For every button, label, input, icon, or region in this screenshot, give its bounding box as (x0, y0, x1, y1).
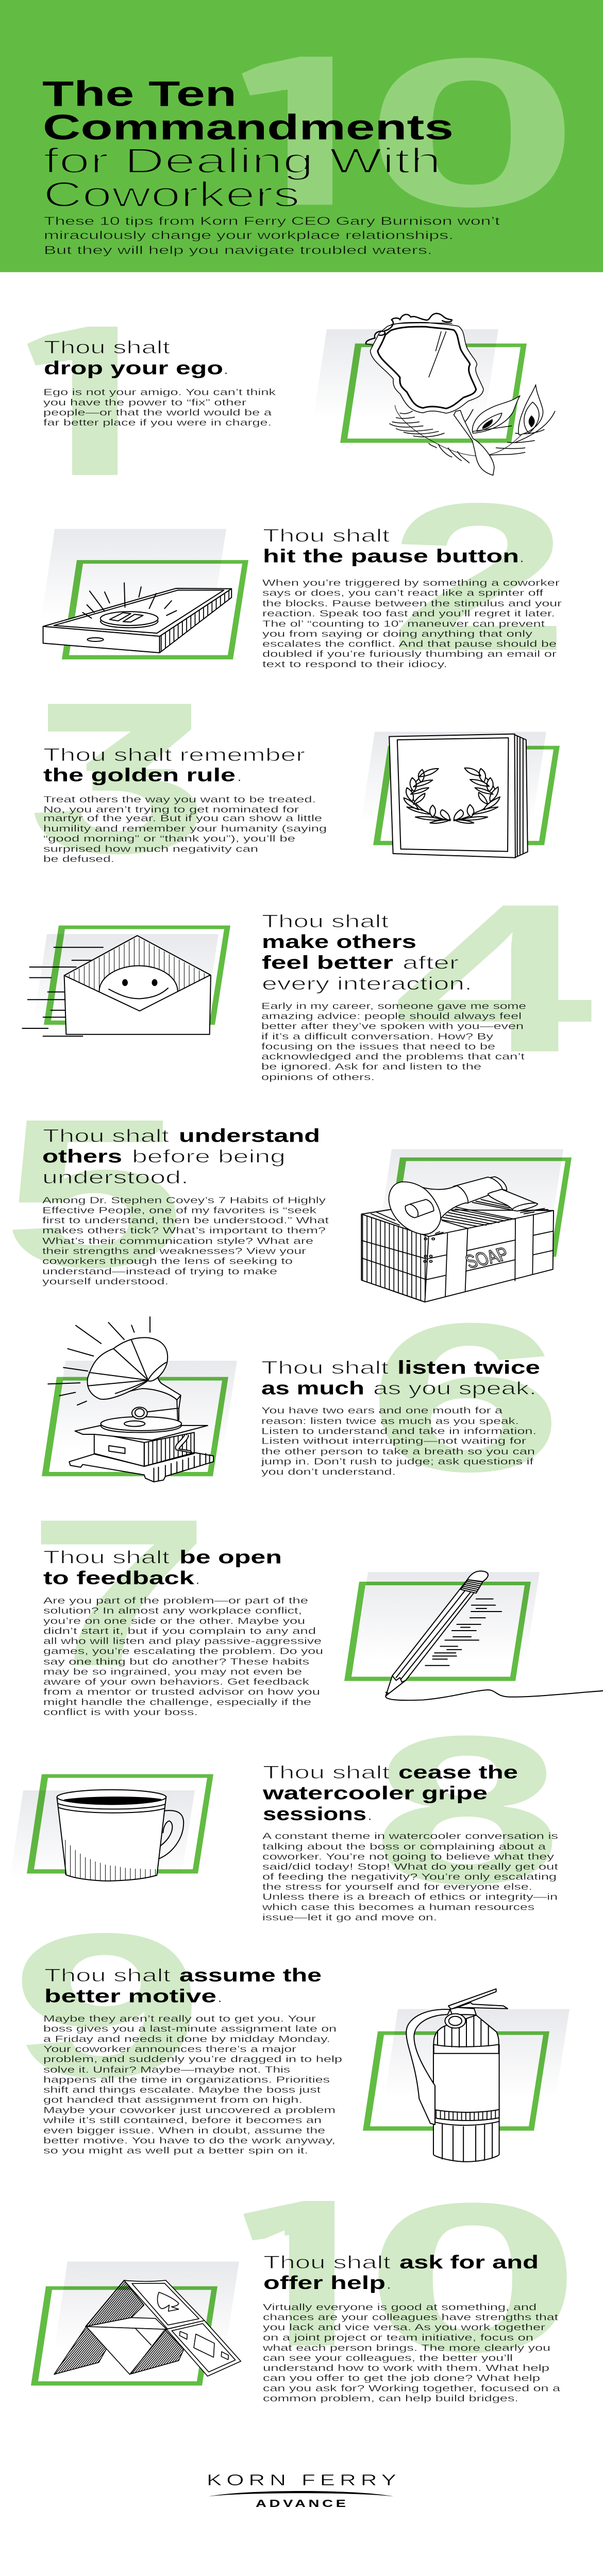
icon: book with laurel wreath (389, 734, 528, 858)
body text: issue—let it go and move on. (262, 1912, 437, 1923)
heading: before being (132, 1147, 286, 1166)
body text: A constant theme in watercooler conversation is (262, 1831, 558, 1841)
body text: you lack and vice versa. As you work together (263, 2323, 545, 2332)
number 4: 4 (393, 859, 596, 1096)
body text: you’re on one side or the other. Maybe you (43, 1616, 305, 1626)
body text: of feeding the negativity? You’re only escalating (262, 1872, 557, 1882)
heading: Thou shalt (263, 526, 390, 546)
body text: games, you’re escalating the problem. Do you (43, 1646, 323, 1656)
heading: others (42, 1146, 122, 1166)
panel: commandment 4 (22, 859, 596, 1096)
heading: every interaction. (262, 974, 472, 994)
body text: “good morning” or “thank you”), you’ll be (43, 834, 295, 844)
heading (44, 338, 228, 379)
body text: coworker. You’re not going to believe what they (262, 1852, 554, 1861)
body text: so you might as well put a better spin on it. (43, 2146, 308, 2156)
icon: pause button box (43, 583, 231, 653)
big number 10: 1 (215, 10, 393, 251)
logo: Korn Ferry Advance (207, 2471, 396, 2510)
hero banner (0, 0, 603, 272)
heading: . (367, 1804, 372, 1824)
body text: Early in my career, someone gave me some (261, 1001, 526, 1011)
heading: as much (261, 1378, 364, 1399)
body text: talking about the boss or complaining about a (262, 1842, 546, 1852)
number 8: 8 (372, 1692, 563, 1927)
body text: might handle the challenge, especially if the (43, 1697, 311, 1707)
icon: coffee mug (57, 1790, 183, 1881)
heading: Thou shalt (261, 1358, 389, 1378)
number 5: 5 (2, 1075, 185, 1311)
body text: chances are your colleagues have strengths that (263, 2312, 558, 2322)
body text: The ol’ “counting to 10” maneuver can prevent (262, 619, 545, 629)
panel: commandment 5 (2, 1075, 572, 1311)
backdrop and frame (32, 925, 230, 1033)
body text: got handed that assignment from on high. (43, 2095, 303, 2105)
body text: the blocks. Pause between the stimulus and your (262, 599, 562, 608)
panel: commandment 1 (1, 280, 555, 521)
body text: understand—instead of trying to make (42, 1266, 277, 1277)
heading (44, 1965, 322, 2006)
body text: Maybe they aren’t really out to get you. Your (43, 2014, 316, 2024)
panel: commandment 8 (8, 1692, 563, 1927)
heading: Thou shalt (44, 1965, 171, 1986)
body text: conflict is with your boss. (43, 1707, 198, 1717)
body text: shift and things escalate. Maybe the boss just (43, 2084, 321, 2095)
backdrop and frame (312, 329, 527, 443)
heading: Thou shalt (43, 1548, 170, 1568)
body text: people—or that the world would be a (43, 408, 272, 418)
body text: can see your colleagues, the better you’ll (263, 2353, 513, 2363)
title (42, 74, 454, 214)
body text: Are you part of the problem—or part of the (43, 1596, 308, 1606)
number 6: 6 (366, 1279, 564, 1516)
body text (261, 1405, 537, 1477)
backdrop and frame (363, 2009, 569, 2131)
icon: pencil and notes (386, 1571, 603, 1700)
body text (42, 1195, 329, 1286)
heading: ask for and (399, 2252, 539, 2273)
big number 10 (215, 10, 581, 251)
body text (262, 2302, 560, 2403)
body text: solve it. Unfair? Maybe—maybe not. This (43, 2064, 290, 2075)
body text: Ego is not your amigo. You can’t think (43, 387, 276, 397)
body text: Unless there is a breach of ethics or integrity—in (262, 1892, 558, 1902)
heading: better motive (44, 1986, 216, 2006)
body text: which case this becomes a human resources (262, 1902, 534, 1912)
body text: far better place if you were in charge. (43, 418, 272, 428)
body text: problem, and suddenly you’re dragged in to help (43, 2054, 342, 2064)
panel: commandment 7 (27, 1476, 603, 1717)
backdrop and frame (344, 1572, 540, 1681)
gramophone horn and turntable (48, 1317, 208, 1440)
body text: first to understand, then be understood.” What (42, 1215, 329, 1226)
body text: on a joint project or team initiative, focus on (263, 2333, 533, 2343)
body text: better after they’ve spoken with you—even (261, 1021, 524, 1031)
backdrop and frame (360, 732, 560, 845)
heading: . (217, 1987, 222, 2006)
body text: if it’s a difficult conversation. How? By (261, 1031, 493, 1041)
number 2: 2 (388, 459, 569, 694)
logo: Korn Ferry Advance: ADVANCE (256, 2498, 346, 2510)
heading: understand (179, 1125, 320, 1146)
panel: commandment 6 (42, 1279, 564, 1516)
heading: drop your ego (44, 358, 223, 379)
heading: the golden rule (43, 765, 236, 786)
gramophone cabinet (69, 1432, 213, 1482)
body text: from a mentor or trusted advisor on how you (43, 1687, 320, 1697)
intro text (44, 215, 500, 257)
title: Commandments (43, 108, 454, 147)
heading: understood. (42, 1167, 189, 1188)
heading (263, 526, 524, 566)
icon: fire extinguisher (406, 1989, 508, 2162)
body text: can you ask for? Working together, focused on a (263, 2383, 560, 2394)
title: The Ten (42, 74, 237, 113)
body text (262, 1831, 558, 1923)
heading (261, 1357, 540, 1399)
body text: Maybe your coworker just uncovered a problem (43, 2105, 336, 2115)
heading: . (224, 359, 228, 379)
body text: Effective People, one of my favorites is “seek (42, 1206, 316, 1215)
body text: amazing advice: people should always feel (261, 1011, 522, 1021)
body text: their strengths and weaknesses? View your (42, 1246, 306, 1256)
body text: Listen to understand and take in information. (261, 1426, 537, 1436)
body text: No, you aren’t trying to get nominated for (43, 805, 299, 815)
heading: after (403, 953, 459, 973)
body text: aware of your own behaviors. Get feedback (43, 1677, 309, 1687)
body text: focusing on the issues that need to be (261, 1042, 495, 1052)
heading (43, 745, 305, 786)
body text: you don’t understand. (261, 1467, 396, 1477)
heading: . (237, 766, 242, 786)
body text: coworkers through the lens of seeking to (42, 1256, 293, 1266)
body text: opinions of others. (261, 1072, 375, 1082)
body text: What’s their communication style? What are (42, 1236, 313, 1246)
body text: Treat others the way you want to be treated. (43, 794, 316, 805)
body text: may be so ingrained, you may not even be (43, 1667, 302, 1676)
body text (43, 794, 327, 864)
body text: happens all the time in organizations. Priorities (43, 2075, 330, 2084)
body text: Among Dr. Stephen Covey’s 7 Habits of Highly (42, 1195, 326, 1206)
body text: you have the power to “fix” other (43, 398, 246, 408)
body text (261, 1001, 526, 1082)
body text: Your coworker announces there’s a major (43, 2044, 296, 2054)
body text: text to respond to their idiocy. (262, 659, 447, 669)
body text: a Friday and needs it done by midday Monday. (43, 2034, 330, 2044)
extinguisher body (433, 2045, 499, 2162)
body text: the stress for yourself and for everyone else. (262, 1882, 532, 1892)
panel: commandment 10 (31, 2151, 583, 2403)
body text (43, 2014, 342, 2156)
heading: be open (179, 1547, 282, 1568)
body text: what each person brings. The more clearly you (262, 2343, 550, 2353)
number 10 (216, 2151, 583, 2396)
heading: Thou shalt (262, 911, 389, 931)
body text: reaction. Speak too fast and you’ll regret it later. (262, 608, 555, 618)
heading: watercooler gripe (262, 1783, 488, 1804)
backdrop and frame (31, 2262, 239, 2385)
SOAP label: SOAP (462, 1244, 512, 1273)
body text: You have two ears and one mouth for a (261, 1405, 502, 1416)
heading (262, 1762, 518, 1824)
body text: understand how to work with them. What help (263, 2363, 549, 2373)
body text: acknowledged and the problems that can’t (261, 1052, 525, 1062)
body text: the other person to take a breath so you can (261, 1447, 535, 1456)
backdrop and frame (42, 1361, 237, 1476)
body text: doubled if you’re furiously thumbing an email or (262, 649, 557, 659)
icon: hand mirror with peacock feathers (366, 313, 555, 476)
big number 10: 0 (363, 14, 581, 250)
body text: When you’re triggered by something a coworker (262, 578, 560, 588)
heading (42, 1125, 320, 1188)
body text: yourself understood. (42, 1277, 169, 1286)
body text: reason: listen twice as much as you speak. (261, 1416, 519, 1426)
heading: offer help (263, 2273, 386, 2293)
body text: Listen without interrupting—not waiting for (261, 1436, 526, 1446)
body text: didn’t start it, but if you complain to any and (43, 1626, 316, 1636)
heading: . (195, 1568, 200, 1588)
body text: even bigger issue. When in doubt, assume the (43, 2125, 325, 2136)
heading (43, 1547, 282, 1588)
heading: Thou shalt remember (43, 745, 305, 765)
backdrop and frame (40, 529, 248, 659)
heading (263, 2252, 539, 2293)
panel: commandment 2 (40, 459, 569, 694)
heading: Thou shalt (263, 1762, 390, 1783)
title: for Dealing With (43, 141, 441, 180)
heading: Thou shalt (44, 338, 170, 358)
heading: . (387, 2274, 391, 2293)
number 7: 7 (27, 1476, 211, 1710)
icon: gramophone (48, 1317, 213, 1482)
icon: house of cards (54, 2280, 241, 2376)
heading: assume the (179, 1965, 322, 1986)
heading: listen twice (397, 1357, 540, 1378)
heading: as you speak. (373, 1379, 537, 1399)
heading: sessions (263, 1804, 366, 1824)
heading: hit the pause button (263, 546, 519, 566)
body text: Virtually everyone is good at something, and (263, 2302, 537, 2312)
heading: make others (262, 931, 416, 952)
heading: cease the (398, 1762, 518, 1783)
body text: you from saying or doing anything that only (262, 629, 532, 639)
body text: common problem, can help build bridges. (263, 2394, 518, 2403)
icon: envelope with smiley (22, 936, 211, 1036)
heading: . (520, 547, 524, 566)
body text: be defused. (43, 854, 114, 864)
body text: be ignored. Ask for and listen to the (261, 1062, 481, 1072)
title: Coworkers (43, 175, 300, 214)
body text: can you offer to get the job done? What help (263, 2373, 540, 2383)
body text: all who will listen and play passive-aggressive (43, 1636, 322, 1646)
backdrop and frame (8, 1774, 213, 1890)
panel: commandment 3 (27, 664, 560, 896)
intro text: These 10 tips from Korn Ferry CEO Gary Burnison won’t (44, 215, 500, 228)
body text: makes others tick? What’s important to them? (42, 1226, 326, 1235)
body text: surprised how much negativity can (43, 844, 258, 854)
body text: while it’s still contained, before it becomes an (43, 2115, 322, 2125)
body text: jump in. Don’t rush to judge; ask questions if (261, 1456, 534, 1466)
logo: Korn Ferry Advance: KORN FERRY (207, 2471, 396, 2489)
number 9: 9 (10, 1891, 205, 2120)
number 3 (34, 704, 198, 854)
intro text: But they will help you navigate troubled waters. (44, 244, 432, 257)
number 3: 3 (27, 664, 209, 896)
body text: martyr of the year. But if you can show a little (43, 813, 322, 823)
body text: says or does, you can’t react like a sprinter off (262, 588, 544, 598)
icon: megaphone on soap box (361, 1177, 554, 1302)
heading: Thou shalt (43, 1126, 169, 1146)
body text: say one thing but do another? These habits (43, 1656, 309, 1667)
heading (262, 911, 472, 994)
body text: better motive. You have to do the work anyway, (43, 2136, 336, 2146)
heading: feel better (262, 952, 393, 973)
number 10: 1 (216, 2151, 394, 2392)
body text: solution? In almost any workplace conflict, (43, 1606, 302, 1616)
body text: boss gives you a last-minute assignment late on (43, 2024, 337, 2034)
body text: said/did today! Stop! What do you really get out (262, 1862, 558, 1872)
body text: humility and remember your humanity (saying (43, 824, 327, 834)
panel: commandment 9 (10, 1891, 569, 2162)
intro text: miraculously change your workplace relationships. (44, 229, 454, 242)
body text (262, 578, 562, 669)
body text (43, 387, 276, 428)
backdrop and frame (377, 1149, 572, 1257)
body text (43, 1596, 323, 1717)
number 10: 0 (363, 2159, 583, 2396)
extinguisher hose and valve (406, 1989, 508, 2125)
heading: Thou shalt (263, 2252, 391, 2273)
body text: escalates the conflict. And that pause should be (262, 639, 557, 649)
heading: to feedback (43, 1568, 194, 1588)
number 1: 1 (1, 280, 178, 521)
